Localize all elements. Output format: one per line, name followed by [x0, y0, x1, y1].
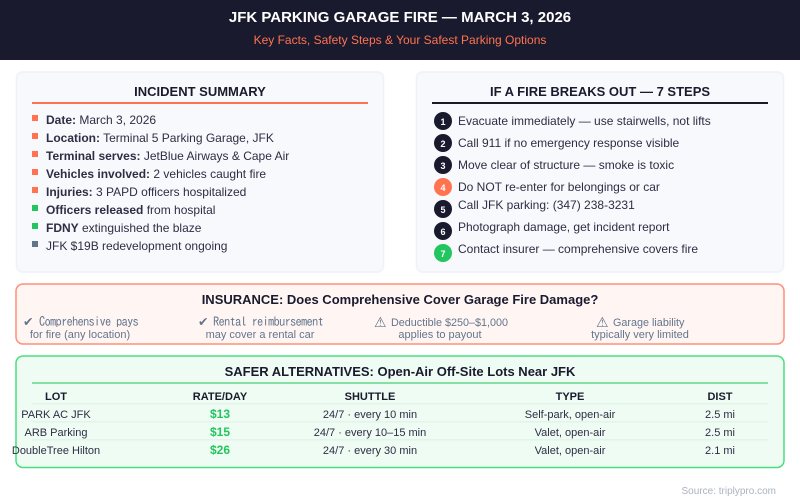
panel: incident summary — [16, 72, 384, 272]
panel: insurance: typically very limited — [591, 329, 689, 341]
table: parking lots: 24/7 · every 10–15 min — [314, 427, 426, 439]
step list: 6 — [440, 227, 446, 237]
insurance point: liability: Garage liability — [613, 317, 685, 329]
step list: 7 — [440, 249, 446, 259]
heading: fire steps: IF A FIRE BREAKS OUT — 7 STEPS — [490, 84, 710, 99]
table: parking lots: RATE/DAY — [193, 391, 248, 403]
step list: 4 — [440, 183, 446, 193]
fact list — [32, 113, 289, 253]
table: parking lots: 2.1 mi — [705, 445, 735, 457]
table: parking lots: 2.5 mi — [705, 427, 735, 439]
source note: Source: triplypro.com — [682, 486, 776, 497]
table: parking lots: TYPE — [556, 391, 584, 403]
insurance point: liability: ⚠ — [596, 315, 609, 329]
panel: insurance: may cover a rental car — [206, 329, 315, 341]
step list: Photograph damage, get incident report — [458, 220, 670, 234]
table: parking lots: Valet, open-air — [535, 427, 606, 439]
panel: insurance: for fire (any location) — [30, 329, 130, 341]
panel: fire steps — [416, 72, 784, 272]
fact list: Location: Terminal 5 Parking Garage, JFK — [46, 131, 274, 145]
table: parking lots: 24/7 · every 30 min — [323, 445, 417, 457]
table: parking lots: DIST — [707, 391, 733, 403]
insurance point: comprehensive: ✔ — [23, 314, 33, 329]
insurance point: deductible: ⚠ — [374, 315, 387, 329]
step list: Call 911 if no emergency response visible — [458, 136, 680, 150]
fact list: Injuries: 3 PAPD officers hospitalized — [46, 185, 246, 199]
table: parking lots: Valet, open-air — [535, 445, 606, 457]
panel: insurance: applies to payout — [398, 329, 482, 341]
title: JFK PARKING GARAGE FIRE — MARCH 3, 2026 — [229, 9, 571, 26]
step list: Call JFK parking: (347) 238-3231 — [458, 198, 635, 212]
table: parking lots: 2.5 mi — [705, 409, 735, 421]
table: parking lots: LOT — [45, 391, 67, 403]
subtitle: Key Facts, Safety Steps & Your Safest Parking Options — [254, 33, 546, 47]
table: parking lots: SHUTTLE — [345, 391, 395, 403]
table: parking lots: PARK AC JFK — [21, 409, 91, 421]
step list: 1 — [440, 117, 446, 127]
table: parking lots: Self-park, open-air — [525, 409, 616, 421]
table: parking lots: $26 — [210, 443, 230, 457]
fact list: Officers released from hospital — [46, 203, 215, 217]
table: parking lots: $13 — [210, 407, 230, 421]
table: parking lots — [12, 391, 768, 457]
header banner — [0, 0, 800, 60]
fact list: Date: March 3, 2026 — [46, 113, 156, 127]
panel: safer alternatives — [12, 356, 784, 468]
step list: Move clear of structure — smoke is toxic — [458, 158, 674, 172]
insurance point: deductible: Deductible $250–$1,000 — [391, 317, 508, 329]
step list: 2 — [440, 139, 446, 149]
fact list: FDNY extinguished the blaze — [46, 221, 202, 235]
step list: 3 — [440, 161, 446, 171]
insurance point: comprehensive: Comprehensive pays — [39, 315, 138, 328]
heading: incident summary: INCIDENT SUMMARY — [134, 84, 266, 99]
step list: Do NOT re-enter for belongings or car — [458, 180, 660, 194]
fact list: Terminal serves: JetBlue Airways & Cape Air — [46, 149, 289, 163]
table: parking lots: 24/7 · every 10 min — [323, 409, 417, 421]
fact list: JFK $19B redevelopment ongoing — [46, 239, 227, 253]
step list — [434, 112, 711, 262]
step list: 5 — [440, 205, 446, 215]
table: parking lots: $15 — [210, 425, 230, 439]
table: parking lots: DoubleTree Hilton — [12, 445, 100, 457]
heading: safer alternatives: SAFER ALTERNATIVES: Open-Air Off-Site Lots Near JFK — [225, 364, 576, 379]
panel: insurance — [16, 284, 784, 344]
heading: insurance: INSURANCE: Does Comprehensive Cover Garage Fire Damage? — [202, 292, 598, 307]
insurance point: rental: ✔ — [198, 314, 208, 329]
step list: Evacuate immediately — use stairwells, not lifts — [458, 114, 711, 128]
insurance point: rental: Rental reimbursement — [213, 315, 323, 328]
table: parking lots: ARB Parking — [25, 427, 87, 439]
fact list: Vehicles involved: 2 vehicles caught fire — [46, 167, 266, 181]
step list: Contact insurer — comprehensive covers fire — [458, 242, 698, 256]
